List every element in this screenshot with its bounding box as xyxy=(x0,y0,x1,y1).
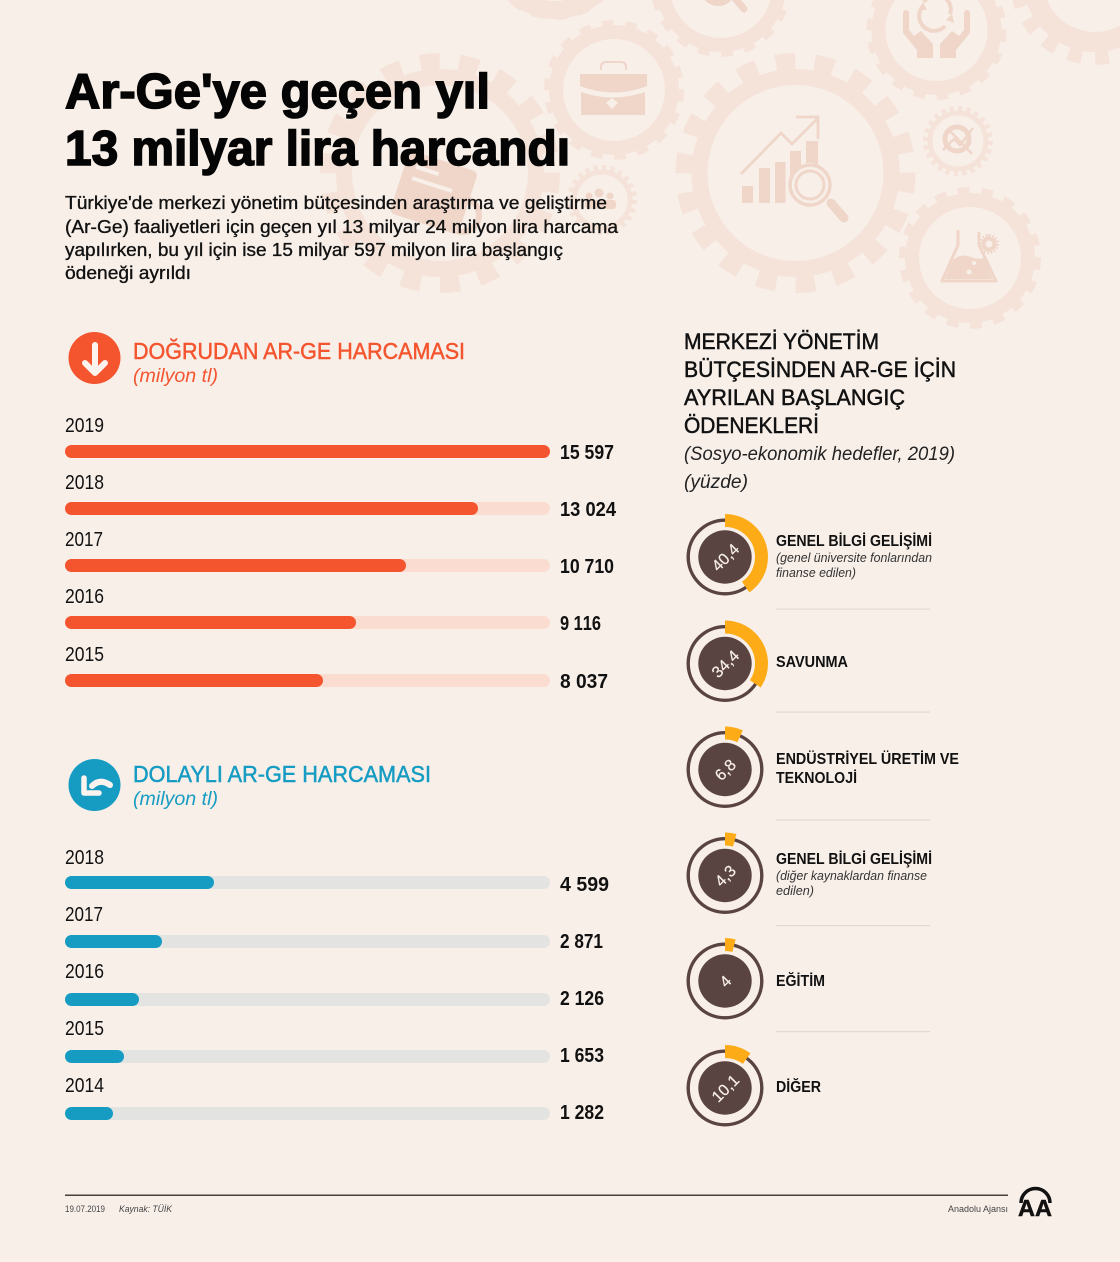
panel: direct R&D spending xyxy=(65,332,617,693)
label: (diğer kaynaklardan finanse xyxy=(776,869,927,883)
heading: allocations: (yüzde) xyxy=(684,472,748,493)
icon: down arrow xyxy=(68,332,120,384)
donut 4,3 xyxy=(688,839,762,912)
label: TEKNOLOJİ xyxy=(776,769,857,787)
row 2018: 2018 xyxy=(65,847,104,869)
donut 4,3: 4,3 xyxy=(712,863,740,890)
heading: direct spending: (milyon tl) xyxy=(133,366,218,387)
title: 13 milyar lira harcandı xyxy=(65,122,570,176)
gear: magnifier top xyxy=(656,0,786,52)
intro paragraph: (Ar-Ge) faaliyetleri için geçen yıl 13 milyar 24 milyon lira harcama xyxy=(65,216,619,237)
row 2019: 2019 xyxy=(65,415,104,437)
heading: indirect spending xyxy=(133,761,431,810)
row 2016: 2 126 xyxy=(560,988,604,1010)
label: finanse edilen) xyxy=(776,566,856,580)
row 2014: 1 282 xyxy=(560,1102,604,1124)
donut 34,4 xyxy=(688,627,762,700)
gear: growth chart with magnifier xyxy=(684,62,906,284)
item: savunma 34,4 xyxy=(688,627,848,700)
date: 19.07.2019 xyxy=(65,1204,105,1214)
row 2015 xyxy=(65,644,608,693)
gear: hands with recycling arrows xyxy=(872,0,1002,95)
row 2017: 2017 xyxy=(65,529,103,551)
title: Ar-Ge'ye geçen yıl xyxy=(65,65,490,119)
donut 6,8: 6,8 xyxy=(712,757,740,784)
label: edilen) xyxy=(776,884,814,898)
heading: allocations: AYRILAN BAŞLANGIÇ xyxy=(684,385,905,410)
item: genel bilgi gelişimi 4,3 xyxy=(688,839,932,912)
label: SAVUNMA xyxy=(776,654,848,671)
row 2016: 9 116 xyxy=(560,613,601,635)
label xyxy=(776,850,932,898)
row 2017: 10 710 xyxy=(560,556,614,578)
row 2018: 13 024 xyxy=(560,499,617,521)
logo: Anadolu Agency: AA xyxy=(1018,1195,1052,1221)
item: genel bilgi gelişimi 40,4 xyxy=(688,520,932,594)
agency name: Anadolu Ajansı xyxy=(948,1204,1008,1214)
donut 4: 4 xyxy=(717,973,735,991)
heading: allocations: BÜTÇESİNDEN AR-GE İÇİN xyxy=(684,357,956,382)
bar chart: direct spending by year xyxy=(65,415,617,693)
item: diğer 10,1 xyxy=(688,1051,821,1125)
gear: flask xyxy=(904,192,1036,324)
background gears with research icons xyxy=(329,0,1120,324)
heading: allocations: (Sosyo-ekonomik hedefler, 2019) xyxy=(684,444,955,465)
donut 10,1: 10,1 xyxy=(709,1072,743,1106)
heading: indirect spending: (milyon tl) xyxy=(133,789,218,810)
donut 34,4: 34,4 xyxy=(709,647,743,682)
row 2016 xyxy=(65,586,601,635)
donut 6,8 xyxy=(688,733,762,806)
heading: indirect spending: DOLAYLI AR-GE HARCAMASI xyxy=(133,761,431,787)
label: GENEL BİLGİ GELİŞİMİ xyxy=(776,532,932,550)
row 2015: 2015 xyxy=(65,1018,104,1040)
row 2016: 2016 xyxy=(65,961,104,983)
row 2015 xyxy=(65,1018,604,1067)
row 2018 xyxy=(65,847,609,896)
row 2015: 2015 xyxy=(65,644,104,666)
gear: top left partial xyxy=(490,0,620,15)
intro paragraph: ödeneği ayrıldı xyxy=(65,262,191,283)
heading: allocations: ÖDENEKLERİ xyxy=(684,413,819,438)
heading: allocations xyxy=(684,329,956,493)
row 2017: 2017 xyxy=(65,904,103,926)
gear: briefcase xyxy=(549,25,679,155)
gear: top right partial xyxy=(1018,0,1120,57)
heading: direct spending: DOĞRUDAN AR-GE HARCAMASI xyxy=(133,338,465,364)
panel: indirect R&D spending xyxy=(65,759,609,1124)
gear: document behind text xyxy=(329,62,551,284)
row 2018: 2018 xyxy=(65,472,104,494)
icon: curved back arrow xyxy=(68,759,120,811)
item: eğitim 4 xyxy=(688,944,825,1018)
heading: direct spending xyxy=(133,338,465,387)
row 2019 xyxy=(65,415,614,464)
row 2019: 15 597 xyxy=(560,442,614,464)
row 2017 xyxy=(65,529,614,578)
row 2018 xyxy=(65,472,617,521)
row 2016: 2016 xyxy=(65,586,104,608)
gear: small people xyxy=(570,168,634,232)
donut 40,4 xyxy=(688,520,762,594)
row 2016 xyxy=(65,961,604,1010)
row 2017 xyxy=(65,904,603,953)
intro paragraph: yapılırken, bu yıl için ise 15 milyar 597 milyon lira başlangıç xyxy=(65,239,563,260)
label: DİĞER xyxy=(776,1077,821,1096)
intro paragraph xyxy=(65,192,619,283)
row 2014 xyxy=(65,1075,604,1124)
title xyxy=(65,65,570,176)
gear: small chart xyxy=(926,108,990,174)
bar chart: indirect spending by year xyxy=(65,847,609,1124)
panel: budget allocation by socio-economic goal xyxy=(684,329,959,1125)
heading: allocations: MERKEZİ YÖNETİM xyxy=(684,329,879,354)
row 2014: 2014 xyxy=(65,1075,104,1097)
footer xyxy=(65,1188,1052,1221)
source: Kaynak: TÜİK xyxy=(119,1204,173,1214)
label: GENEL BİLGİ GELİŞİMİ xyxy=(776,850,932,868)
item: endüstriyel üretim 6,8 xyxy=(688,733,959,806)
label xyxy=(776,532,932,580)
label: ENDÜSTRİYEL ÜRETİM VE xyxy=(776,749,959,768)
row 2015: 8 037 xyxy=(560,671,608,693)
label: (genel üniversite fonlarından xyxy=(776,551,932,565)
label: EĞİTİM xyxy=(776,971,825,990)
label xyxy=(776,749,959,787)
row 2017: 2 871 xyxy=(560,931,603,953)
row 2018: 4 599 xyxy=(560,874,609,896)
intro paragraph: Türkiye'de merkezi yönetim bütçesinden araştırma ve geliştirme xyxy=(65,192,607,213)
row 2015: 1 653 xyxy=(560,1045,604,1067)
donut 40,4: 40,4 xyxy=(709,541,743,575)
